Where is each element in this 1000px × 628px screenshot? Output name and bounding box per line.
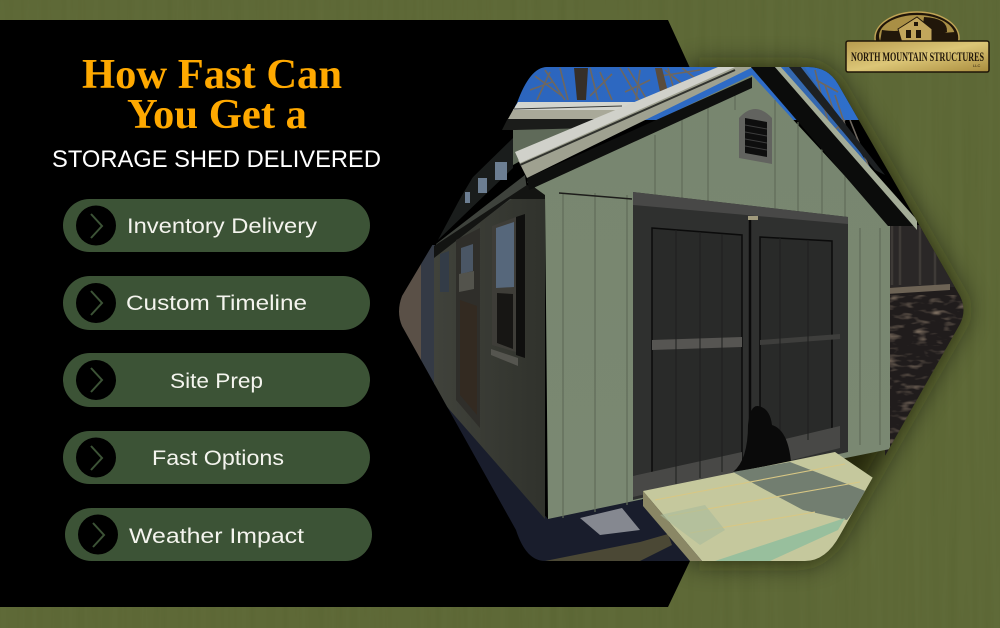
sky and trees (515, 67, 919, 225)
item: Site Prep: Site Prep (170, 369, 263, 393)
double doors (633, 192, 848, 500)
title: How Fast Can (82, 52, 342, 98)
side door (456, 228, 480, 428)
wooden deck ramp (643, 452, 885, 561)
gravel (444, 402, 702, 561)
logo: North Mountain Structures: LLC (973, 63, 980, 68)
item: Weather Impact: Weather Impact (129, 524, 304, 548)
item: Fast Options: Fast Options (152, 446, 284, 470)
item: Weather Impact (65, 508, 372, 561)
item: Site Prep (63, 353, 370, 407)
item: Custom Timeline (63, 276, 370, 330)
title (82, 52, 342, 138)
rear section with roof (502, 102, 640, 165)
gable roof (515, 66, 917, 230)
item: Custom Timeline: Custom Timeline (126, 291, 307, 315)
subtitle: STORAGE SHED DELIVERED (52, 146, 381, 173)
side window (504, 218, 516, 352)
item: Fast Options (63, 431, 370, 484)
logo: North Mountain Structures (846, 12, 989, 72)
wooded ground right (885, 225, 964, 456)
dormer with windows (436, 138, 527, 252)
item: Inventory Delivery (63, 199, 370, 252)
gable vent (739, 109, 772, 164)
side wall (434, 185, 546, 519)
title: You Get a (127, 92, 307, 138)
front wall (527, 75, 890, 519)
photo: green storage shed in hexagon (395, 60, 970, 570)
hexagon shadow (690, 67, 964, 561)
wooded ground left (399, 245, 435, 385)
item: Inventory Delivery: Inventory Delivery (127, 214, 317, 238)
black panel (0, 20, 690, 607)
shadow of photographer (733, 406, 791, 472)
